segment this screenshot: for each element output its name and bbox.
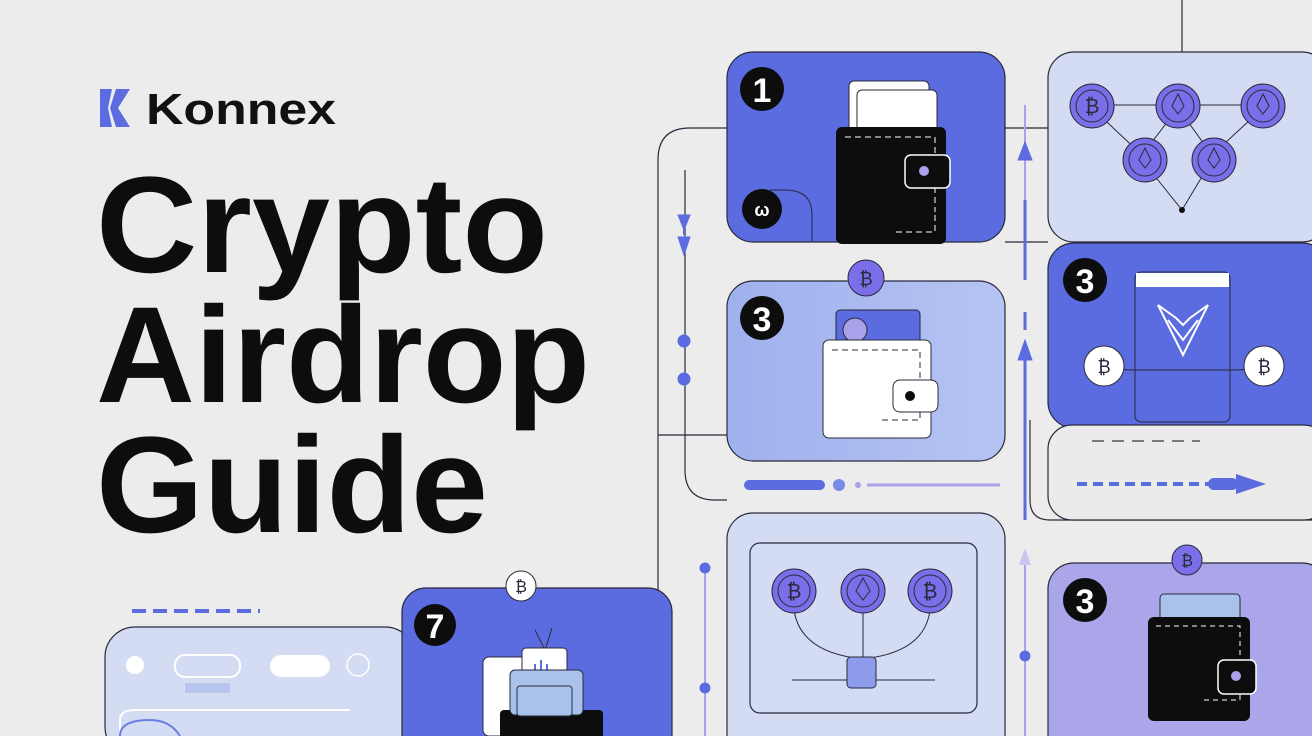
progress bar [744, 479, 1000, 491]
panel 3 right: ₿ [1257, 357, 1271, 377]
logo: Konnex [146, 85, 337, 134]
panel 7: 7 [426, 608, 444, 646]
panel 3 bottom right: 3 [1076, 583, 1094, 621]
panel: bottom center coins: ₿ [923, 581, 937, 603]
panel 3 right: ₿ [1097, 357, 1111, 377]
panel 7: ₿ [515, 578, 527, 596]
panel 3 bottom right [1048, 545, 1312, 736]
panel: lower right light [1048, 425, 1312, 520]
panel: network top-right [1048, 52, 1312, 242]
panel 1: 1 [753, 72, 771, 110]
panel: network top-right: ₿ [1085, 96, 1099, 118]
panel 3 right [1048, 243, 1312, 428]
panel 3 bottom right: ₿ [1181, 552, 1193, 570]
arrows mid [700, 312, 1032, 736]
title [96, 149, 590, 562]
panel 3 middle [727, 260, 1005, 461]
panel: bottom-left ui [105, 627, 415, 736]
title: Airdrop [96, 279, 590, 432]
panel 1 [727, 52, 1005, 244]
arrows: panel1 [678, 105, 1032, 385]
panel 3 right: 3 [1076, 263, 1094, 301]
title: Guide [96, 409, 488, 562]
title: Crypto [96, 149, 548, 302]
connector lines [658, 0, 1312, 736]
logo [100, 85, 337, 134]
panel 7 [402, 571, 672, 736]
panel 1: ω [754, 200, 770, 220]
panel: bottom center coins [727, 513, 1005, 736]
panel 3 middle: ₿ [859, 269, 873, 289]
panel 3 middle: 3 [753, 301, 771, 339]
dashed decoration [132, 609, 260, 613]
panel: bottom center coins: ₿ [787, 581, 801, 603]
